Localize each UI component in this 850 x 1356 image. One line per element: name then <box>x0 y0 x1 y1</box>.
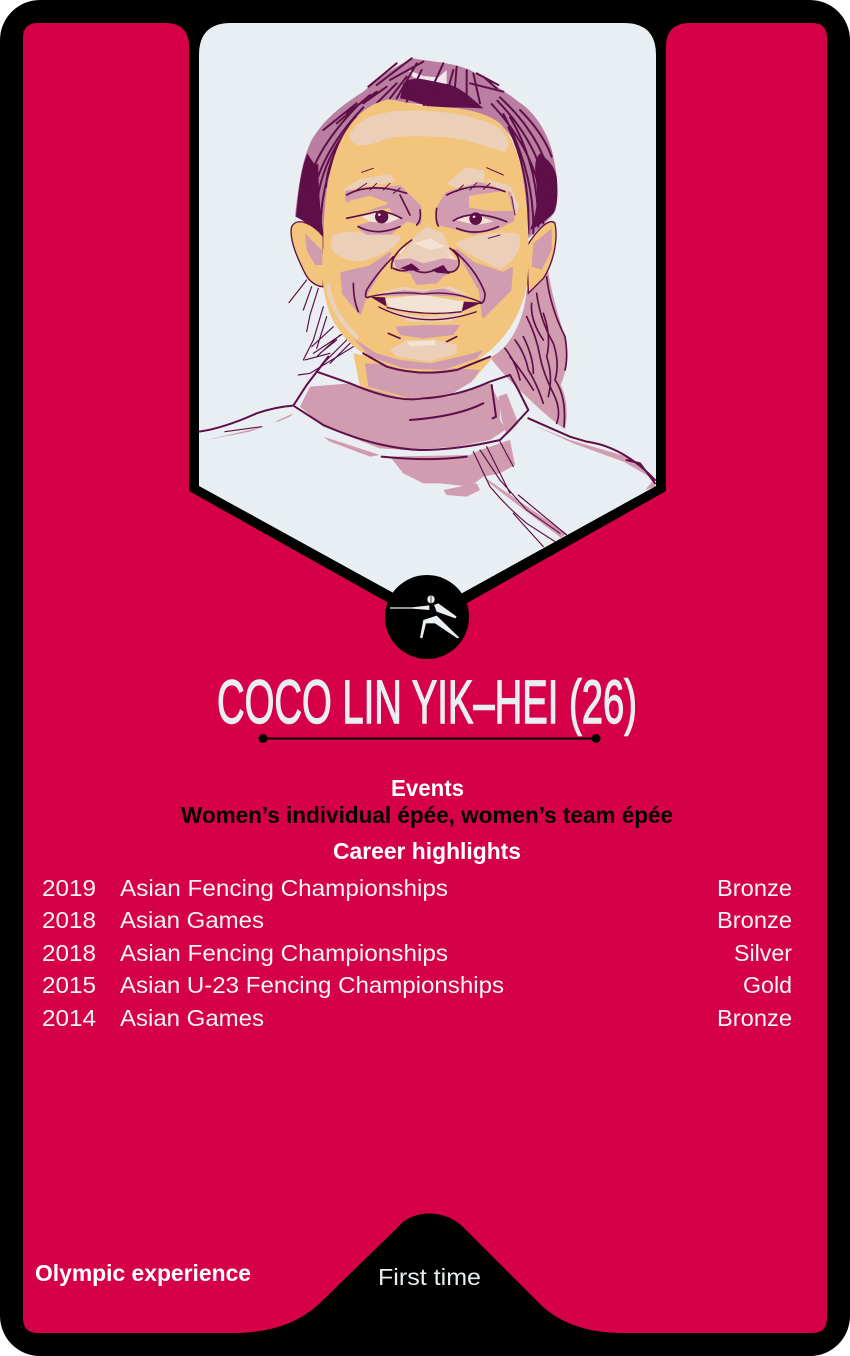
nose <box>393 227 457 270</box>
row 2019: Asian Fencing Championships <box>120 875 448 901</box>
neck <box>353 353 494 398</box>
row 2019: Bronze <box>717 875 792 901</box>
events heading: Events <box>391 775 464 801</box>
events list: Women’s individual épée, women’s team épée <box>181 802 673 828</box>
row 2015: Gold <box>743 972 792 998</box>
portrait panel <box>199 23 656 612</box>
events block <box>181 775 673 828</box>
face <box>322 99 529 372</box>
row 2018 games <box>42 907 792 933</box>
row 2014: Bronze <box>717 1005 792 1031</box>
hair <box>295 58 557 240</box>
icon: fencer <box>390 595 459 638</box>
row 2018 championships <box>42 940 792 966</box>
career highlights table <box>42 875 792 1031</box>
loose hair <box>289 280 353 375</box>
row 2019 <box>42 875 792 901</box>
row 2014: 2014 <box>42 1005 96 1031</box>
row 2014 <box>42 1005 792 1031</box>
row 2018 championships: 2018 <box>42 940 96 966</box>
row 2018 games: 2018 <box>42 907 96 933</box>
portrait illustration <box>199 58 655 547</box>
row 2019: 2019 <box>42 875 96 901</box>
row 2018 games: Asian Games <box>120 907 264 933</box>
career highlights heading: Career highlights <box>333 838 521 864</box>
olympic experience value: First time <box>378 1264 481 1290</box>
olympic experience label: Olympic experience <box>35 1260 251 1286</box>
mouth <box>370 287 482 322</box>
face lines <box>353 195 485 342</box>
chin <box>395 325 460 338</box>
event icon: fencer badge <box>385 575 469 659</box>
row 2018 games: Bronze <box>717 907 792 933</box>
row 2015: Asian U-23 Fencing Championships <box>120 972 504 998</box>
eyes <box>347 168 515 238</box>
ponytail <box>490 272 567 429</box>
row 2018 championships: Silver <box>734 940 792 966</box>
ear right <box>527 222 556 293</box>
row 2014: Asian Games <box>120 1005 264 1031</box>
row 2018 championships: Asian Fencing Championships <box>120 940 448 966</box>
portrait background <box>199 23 656 612</box>
ear left <box>291 222 326 287</box>
collar <box>199 353 655 547</box>
row 2015 <box>42 972 792 998</box>
row 2015: 2015 <box>42 972 96 998</box>
name underline <box>258 734 600 743</box>
jaw shading <box>328 287 357 337</box>
